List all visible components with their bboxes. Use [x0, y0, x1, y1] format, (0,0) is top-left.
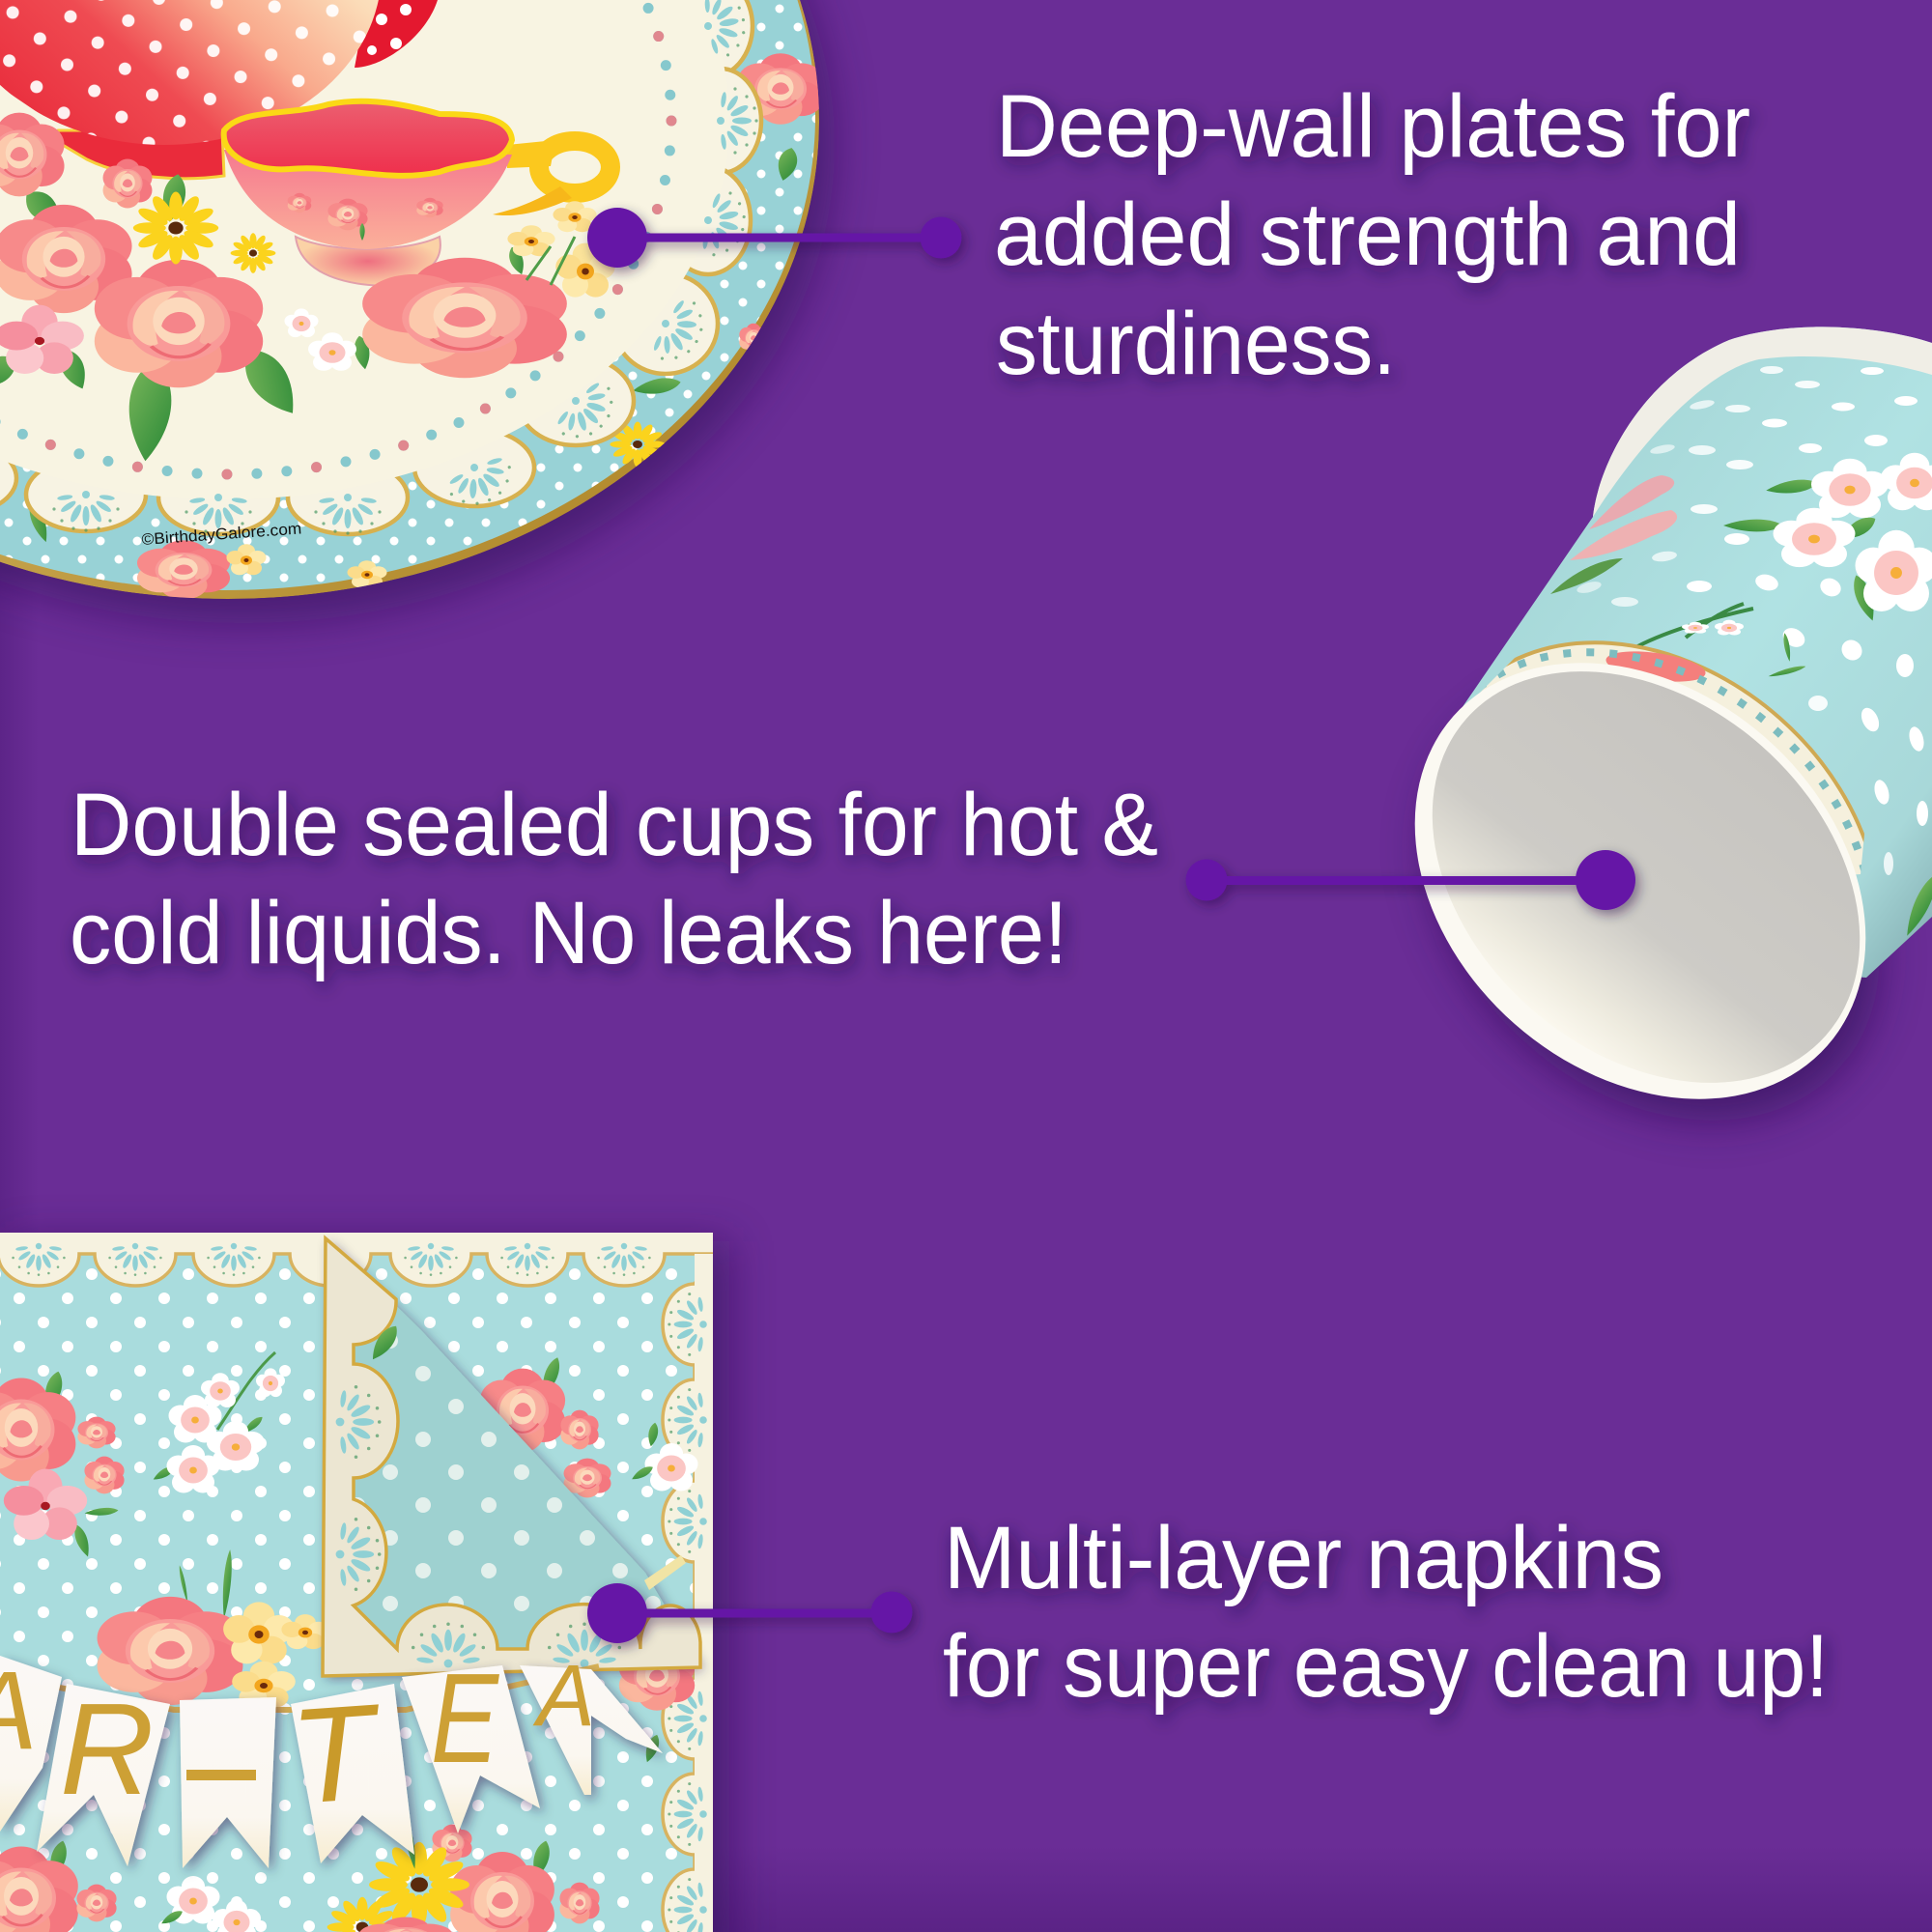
- flap dots: [323, 1236, 700, 1674]
- pennant: R: [37, 1676, 170, 1866]
- pennant: E: E: [431, 1647, 500, 1789]
- connector line: [1207, 876, 1605, 885]
- connector end dot: [871, 1592, 912, 1633]
- cup body: [224, 150, 512, 249]
- folded corner flap: [323, 1236, 700, 1676]
- connector line: [617, 1609, 892, 1617]
- text: plates: sturdiness.: [996, 295, 1396, 393]
- lace fans: [12, 1243, 707, 1932]
- connector end dot: [920, 216, 962, 259]
- teapot foot: [46, 130, 224, 179]
- connector anchor dot: [1576, 850, 1635, 910]
- napkin shadow: [10, 1241, 729, 1932]
- scalloped lace edge: [0, 0, 761, 534]
- napkin: [0, 1227, 720, 1932]
- lace fans: [0, 0, 758, 535]
- pennant: R: R: [60, 1676, 155, 1822]
- teapot: [0, 0, 438, 179]
- teacup: [224, 101, 611, 286]
- text: napkins: for super easy clean up!: [943, 1617, 1829, 1716]
- right edge cream band: [695, 1254, 715, 1932]
- lace band perforations: [1483, 648, 1861, 871]
- connector anchor dot: [587, 1583, 647, 1643]
- band fill: [1480, 640, 1864, 875]
- flap back: [323, 1236, 700, 1674]
- top lace border: [0, 1227, 715, 1286]
- callout: napkins connector: [587, 1583, 912, 1643]
- right lace border: [663, 1246, 720, 1932]
- pennant: T: T: [286, 1675, 387, 1833]
- callout: plates connector: [587, 208, 962, 268]
- connector end dot: [1186, 860, 1227, 900]
- cup rose at base: [1605, 651, 1706, 682]
- cup shadow: [1341, 595, 1932, 1209]
- pennant: A end: [520, 1648, 663, 1795]
- cup base ellipse: [1327, 574, 1932, 1188]
- cup flowers: [288, 193, 443, 241]
- connector line: [617, 234, 941, 242]
- text: cups: Double sealed cups for hot &: [71, 776, 1158, 874]
- cup handle: [493, 140, 611, 215]
- cup rim: [1593, 327, 1932, 517]
- plate centre: [0, 0, 729, 499]
- text: cups: cold liquids. No leaks here!: [70, 884, 1067, 982]
- cup rim: [224, 101, 512, 176]
- text: napkins: Multi-layer napkins: [944, 1509, 1663, 1607]
- teapot lid side: [355, 0, 438, 68]
- plate floral bouquet: [0, 113, 615, 463]
- cup foot: [296, 237, 440, 286]
- gold rim: [0, 0, 819, 599]
- cup polka dots: [1576, 366, 1928, 875]
- teapot body: [0, 0, 382, 145]
- banner string: [0, 1666, 599, 1710]
- flap leaves: [366, 1321, 403, 1364]
- ribbon scrap: [644, 1555, 686, 1590]
- text: plates: Deep-wall plates for: [996, 77, 1750, 176]
- flap lace border: [323, 1238, 700, 1676]
- connector anchor dot: [587, 208, 647, 268]
- pennant: A: [0, 1649, 62, 1832]
- teal ring flowers: [25, 53, 823, 600]
- cup lace band: [1480, 640, 1864, 875]
- text: plates: added strength and: [994, 185, 1741, 284]
- cup flowers: [1550, 453, 1932, 939]
- pennant: dash: [180, 1697, 276, 1868]
- napkin base: [0, 1233, 713, 1932]
- dotted ring: [0, 0, 671, 474]
- flap corner leaf: [587, 1583, 611, 1614]
- cup body: [1456, 327, 1932, 978]
- napkin polka dots: [0, 1233, 713, 1932]
- pennant banner: [0, 1647, 663, 1868]
- cup base interior: [1350, 587, 1932, 1167]
- pennant: A end: A: [532, 1648, 595, 1745]
- paper cup: [1414, 327, 1932, 1099]
- teal ring: [0, 0, 815, 590]
- plate: [0, 0, 823, 600]
- pennant: E: [402, 1647, 540, 1833]
- plate shadow: [0, 0, 835, 623]
- callout: cups connector: [1186, 850, 1635, 910]
- napkin floral clusters: [0, 1352, 697, 1932]
- pennant: T: [286, 1675, 414, 1863]
- flap lace fans: [336, 1385, 621, 1667]
- copyright text: ©BirthdayGalore.com: [141, 520, 302, 549]
